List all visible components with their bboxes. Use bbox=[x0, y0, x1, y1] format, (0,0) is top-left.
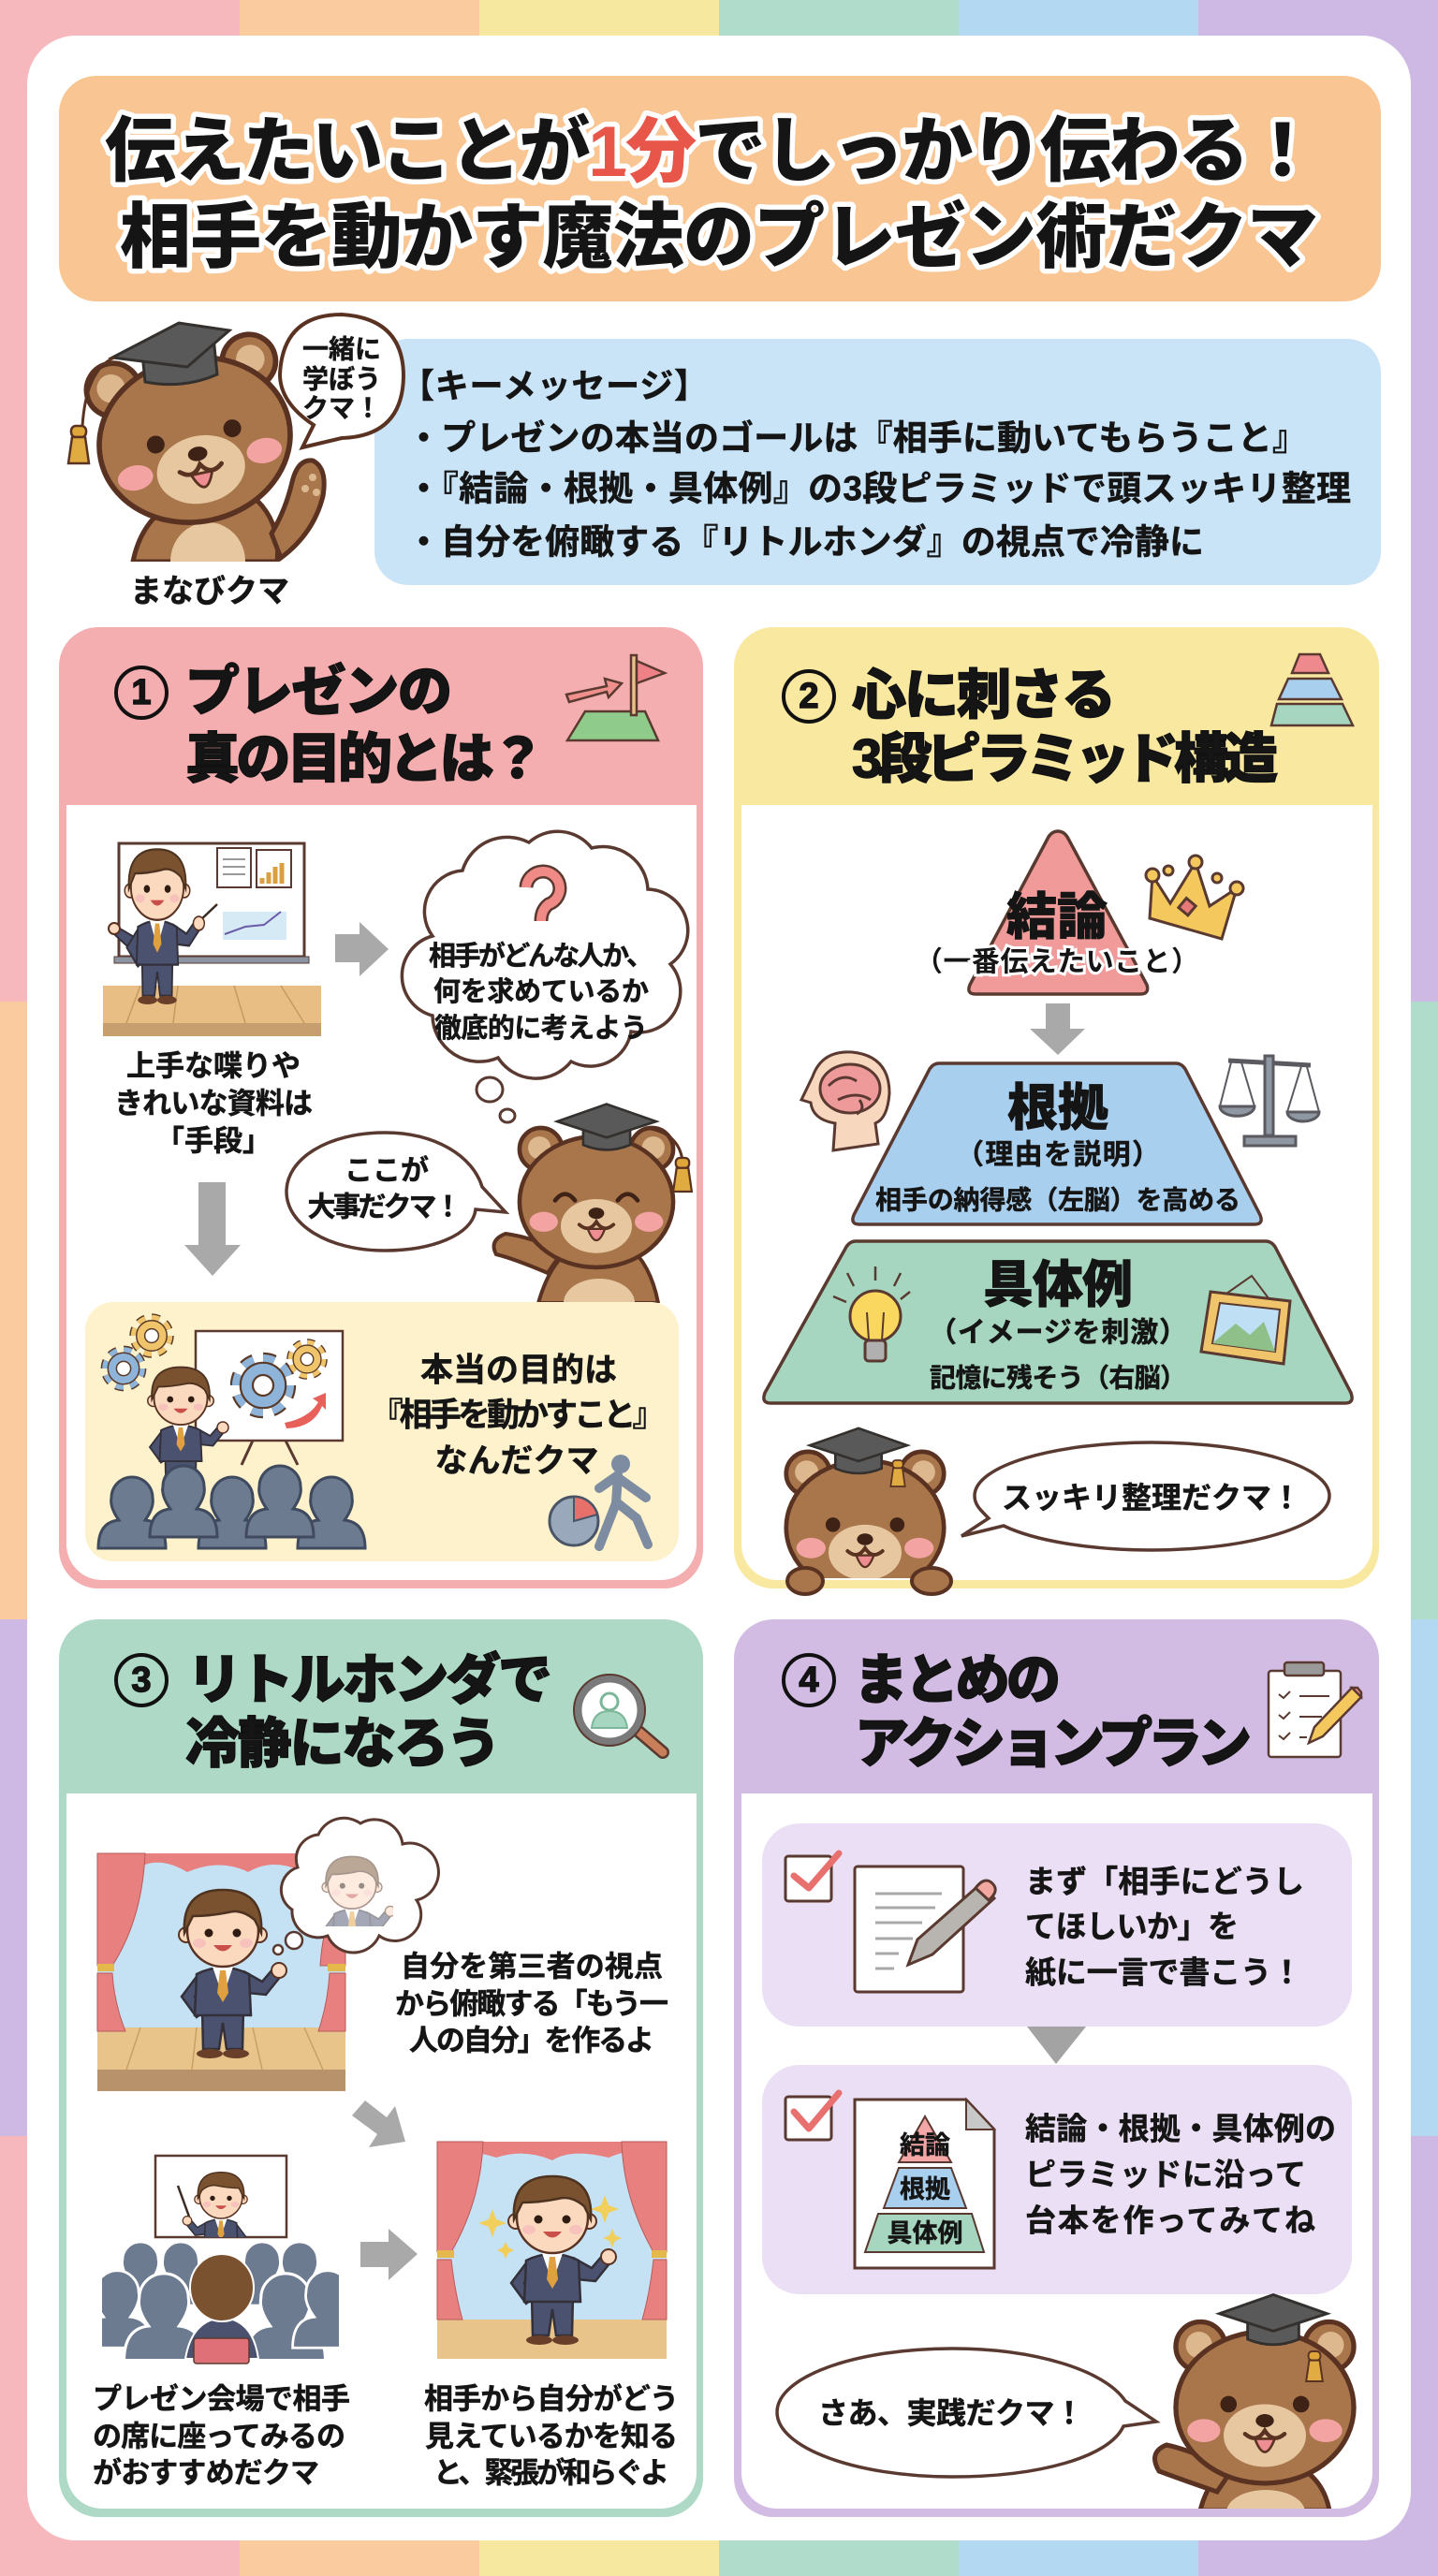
speech bubble: 一緒に学ぼうクマ bbox=[280, 315, 404, 447]
title banner bbox=[59, 76, 1381, 301]
heading 3: リトルホンダで bbox=[187, 1649, 552, 1711]
mascot: bear peeking bbox=[786, 1428, 951, 1595]
pyramid tier: 根拠: 根拠 bbox=[1007, 1080, 1108, 1136]
text: プレゼン会場で相手の席に: プレゼン会場で相手 bbox=[93, 2383, 350, 2415]
icon: goal flag bbox=[566, 655, 665, 740]
mascot name: まなびクマ bbox=[130, 574, 289, 609]
callout: 本当の目的は bbox=[85, 1302, 679, 1561]
speech bubble: スッキリ整理だクマ: スッキリ整理だクマ！ bbox=[1002, 1481, 1301, 1515]
panel 3: リトルホンダで冷静になろう bbox=[59, 1619, 703, 2517]
icon: paper and pencil bbox=[855, 1866, 995, 1992]
illustration: presenter at whiteboard bbox=[103, 843, 321, 1036]
icon: clipboard with pencil bbox=[1269, 1662, 1361, 1757]
mascot: bear with closed eyes bbox=[494, 1105, 692, 1327]
heading 1: プレゼンの bbox=[185, 661, 452, 723]
heading 3: 3 bbox=[131, 1661, 152, 1700]
icon: document with pyramid: 結論 bbox=[900, 2131, 950, 2159]
speech bubble: 一緒に学ぼうクマ: 学ぼう bbox=[302, 365, 381, 393]
illustration: audience viewpoint bbox=[102, 2155, 339, 2364]
panel: key message bbox=[374, 339, 1381, 585]
heading 3: 冷静になろう bbox=[185, 1713, 501, 1775]
icon: sparkles bbox=[478, 2195, 622, 2259]
speech bubble: 一緒に学ぼうクマ: 一緒に bbox=[302, 335, 381, 363]
speech bubble: スッキリ整理だクマ bbox=[961, 1442, 1329, 1550]
heading 2: 3段ピラミッド構造 bbox=[852, 728, 1278, 790]
text: 上手な喋りやきれいな資料は「手段」: 「手段」 bbox=[155, 1125, 271, 1157]
heading 1: 真の目的とは？ bbox=[185, 728, 545, 790]
thought cloud: 相手がどんな人か: 相手がどんな人か、 bbox=[429, 940, 653, 972]
callout: 本当の目的は: 『相手を動かすこと』 bbox=[371, 1397, 665, 1434]
pyramid tier: 根拠: 相手の納得感（左脳）を高める bbox=[875, 1185, 1240, 1215]
heading 3 bbox=[116, 1649, 552, 1775]
pyramid tier: 具体例 bbox=[764, 1241, 1352, 1403]
speech bubble: ここが大事だクマ: 大事だクマ！ bbox=[307, 1193, 462, 1222]
illustration: stage with confident presenter bbox=[437, 2142, 667, 2359]
pyramid tier: 具体例: （イメージを刺激） bbox=[929, 1318, 1187, 1348]
heading 4 bbox=[784, 1649, 1252, 1775]
speech bubble: ここが大事だクマ: ここが bbox=[345, 1155, 429, 1187]
illustration: presenter with gears and audience bbox=[98, 1318, 365, 1548]
speech bubble: さあ、実践だクマ: さあ、実践だクマ！ bbox=[818, 2396, 1084, 2430]
step 1: write a single sentence: てほしいか」を bbox=[1025, 1910, 1239, 1943]
panel: key message: ・自分を俯瞰する『リトルホンダ』の視点で冷静に bbox=[406, 522, 1204, 562]
heading 4: 4 bbox=[799, 1661, 819, 1700]
arrow: right bbox=[335, 922, 389, 976]
mascot: まなびクマ with speech bubble bbox=[68, 315, 404, 609]
text: 自分を第三者の視点: から俯瞰する「もう一 bbox=[395, 1988, 668, 2020]
text: 上手な喋りやきれいな資料は「手段」: 上手な喋りや bbox=[126, 1050, 301, 1082]
speech bubble: さあ、実践だクマ bbox=[777, 2349, 1156, 2477]
illustration: stage with presenter bbox=[97, 1853, 345, 2091]
icon: light bulb bbox=[833, 1266, 910, 1361]
heading 1: 1 bbox=[131, 673, 152, 712]
icon: checkbox bbox=[785, 2093, 839, 2140]
heading 2: 心に刺さる bbox=[852, 665, 1116, 726]
icon: walking person and pie chart bbox=[550, 1455, 648, 1546]
step 2: make a script: 台本を作ってみてね bbox=[1025, 2203, 1315, 2237]
panel 4: まとめのアクションプラン bbox=[734, 1619, 1379, 2535]
icon: bear mascot bbox=[67, 322, 327, 562]
speech bubble: ここが大事だクマ bbox=[286, 1133, 506, 1251]
pyramid tier: 根拠 bbox=[853, 1063, 1261, 1224]
mascot: waving bear bbox=[1155, 2295, 1354, 2535]
arrow: right bbox=[360, 2229, 418, 2280]
icon: magnifier with person bbox=[574, 1675, 663, 1752]
text: 相手から自分がどう見えているか: 見えているかを知る bbox=[425, 2421, 678, 2452]
callout: 本当の目的は: なんだクマ bbox=[434, 1443, 599, 1479]
icon: question mark bbox=[526, 871, 560, 921]
text: 自分を第三者の視点: 人の自分」を作るよ bbox=[409, 2024, 654, 2057]
arrow: down bbox=[184, 1182, 241, 1276]
arrow: diagonal bbox=[352, 2100, 405, 2147]
pyramid tier: 具体例: 記憶に残そう（右脳） bbox=[930, 1363, 1186, 1393]
pyramid tier: 根拠: （理由を説明） bbox=[956, 1140, 1160, 1170]
text: プレゼン会場で相手の席に: がおすすめだクマ bbox=[93, 2456, 319, 2490]
heading 4: まとめの bbox=[854, 1649, 1061, 1711]
icon: head with brain bbox=[801, 1052, 889, 1150]
icon: document with pyramid: 根拠 bbox=[900, 2175, 950, 2203]
text: 自分を第三者の視点: 自分を第三者の視点 bbox=[401, 1951, 663, 1983]
pyramid tier: 結論: （一番伝えたいこと） bbox=[915, 947, 1199, 977]
panel: key message: ・『結論・根拠・具体例』の3段ピラミッドで頭スッキリ整理 bbox=[406, 470, 1351, 507]
step 1: write a single sentence: 紙に一言で書こう！ bbox=[1025, 1954, 1302, 1990]
speech bubble: 一緒に学ぼうクマ: クマ！ bbox=[302, 393, 381, 423]
text: 相手から自分がどう見えているか: と、緊張が和らぐよ bbox=[433, 2456, 669, 2490]
icon: checkbox bbox=[785, 1853, 839, 1901]
pyramid tier: 結論 bbox=[915, 831, 1199, 994]
panel: key message: ・プレゼンの本当のゴールは『相手に動いてもらうこと』 bbox=[406, 417, 1307, 457]
text: 自分を第三者の視点 bbox=[395, 1951, 668, 2057]
thought cloud: 相手がどんな人か bbox=[402, 831, 688, 1122]
text: 相手から自分がどう見えているか: 相手から自分がどう bbox=[424, 2383, 679, 2415]
arrow: down bbox=[1030, 1003, 1085, 1055]
step 1: write a single sentence bbox=[762, 1823, 1352, 2027]
step 2: make a script: ピラミッドに沿って bbox=[1025, 2157, 1306, 2192]
panel 2: 3段ピラミッド構造 bbox=[734, 627, 1379, 1595]
heading 4: アクションプラン bbox=[855, 1713, 1252, 1775]
thought cloud: 相手がどんな人か: 徹底的に考えよう bbox=[434, 1013, 648, 1044]
text: 上手な喋りやきれいな資料は「手段」: きれいな資料は bbox=[114, 1088, 313, 1120]
icon: balance scale bbox=[1220, 1056, 1319, 1146]
panel: key message: 【キーメッセージ】 bbox=[401, 367, 708, 404]
icon: document with pyramid bbox=[855, 2100, 994, 2268]
thought cloud: 相手がどんな人か: 何を求めているか bbox=[433, 976, 649, 1007]
title banner: 相手を動かす魔法のプレゼン術だクマ bbox=[120, 198, 1318, 277]
step 2: make a script: 結論・根拠・具体例の bbox=[1025, 2112, 1336, 2145]
step 1: write a single sentence: まず「相手にどうし bbox=[1025, 1865, 1304, 1898]
callout: 本当の目的は: 本当の目的は bbox=[420, 1352, 617, 1389]
panel 1: プレゼンの真の目的とは bbox=[59, 627, 703, 1588]
arrow: down triangle bbox=[1027, 2027, 1086, 2064]
title banner: 伝えたいことが1分でしっかり伝わる！ bbox=[105, 112, 1318, 191]
pyramid tier: 具体例: 具体例 bbox=[983, 1257, 1133, 1313]
text: 上手な喋りやきれいな資料は「手段」 bbox=[114, 1050, 313, 1157]
text: プレゼン会場で相手の席に: の席に座ってみるの bbox=[93, 2421, 345, 2452]
heading 2: 2 bbox=[799, 677, 819, 716]
icon: small pyramid bbox=[1271, 654, 1353, 725]
text: 相手から自分がどう見えているか bbox=[424, 2383, 679, 2490]
heading 1 bbox=[116, 661, 545, 790]
icon: framed picture bbox=[1201, 1276, 1290, 1364]
thought cloud: other self bbox=[273, 1818, 438, 1971]
icon: crown bbox=[1146, 856, 1243, 939]
heading 2 bbox=[784, 665, 1278, 790]
pyramid tier: 結論: 結論 bbox=[1006, 889, 1108, 945]
icon: document with pyramid: 具体例 bbox=[888, 2219, 962, 2247]
step 2: make a script bbox=[762, 2065, 1352, 2294]
text: プレゼン会場で相手の席に bbox=[93, 2383, 350, 2490]
